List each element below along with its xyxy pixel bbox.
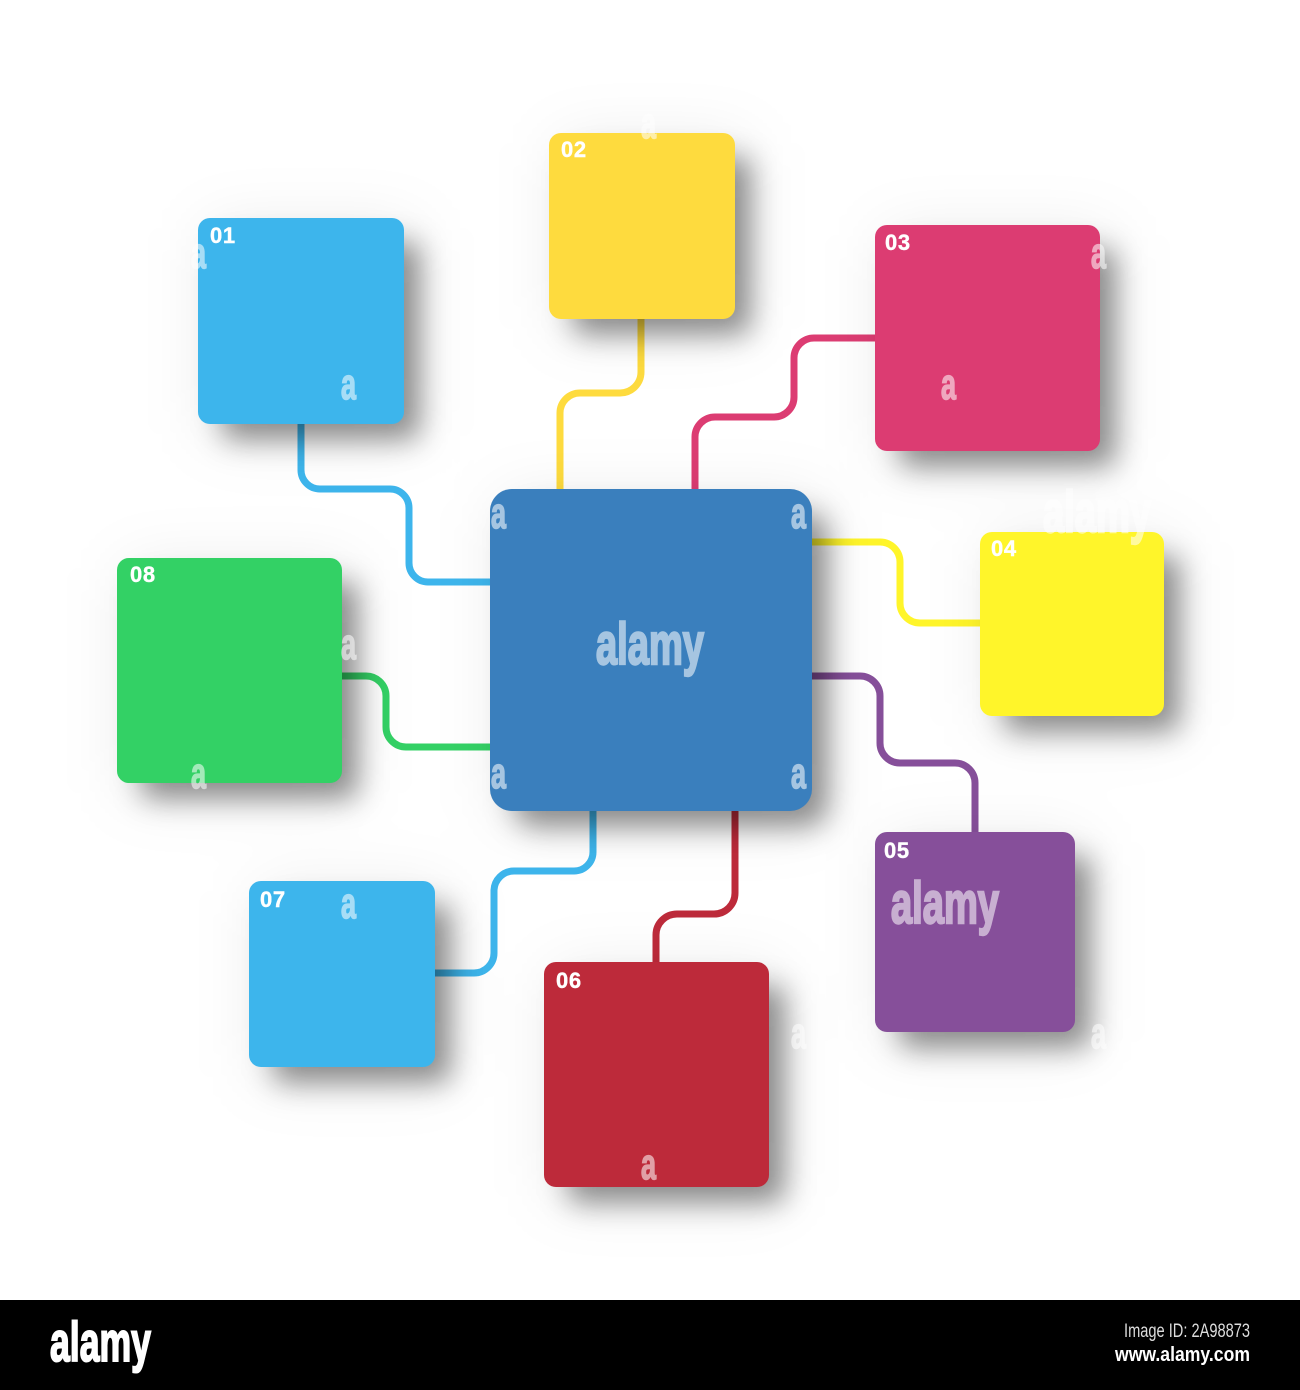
box 05 <box>875 832 1075 1032</box>
box 03 <box>875 225 1100 451</box>
box 06: 06 <box>556 968 582 993</box>
box 07 <box>249 881 435 1067</box>
connector 03 <box>695 338 876 490</box>
footer bar <box>0 1300 1300 1390</box>
watermarks: a <box>341 360 356 409</box>
box 06 <box>544 962 769 1187</box>
watermarks: a <box>341 879 356 928</box>
connector 02 <box>560 319 641 490</box>
watermarks: alamy <box>891 871 999 936</box>
box 08: 08 <box>130 562 156 587</box>
box 02 <box>549 133 735 319</box>
drop shadows <box>127 143 1180 1203</box>
central hub box <box>490 489 812 811</box>
watermarks: a <box>791 749 806 798</box>
watermarks: a <box>791 489 806 538</box>
watermarks: a <box>1091 229 1106 278</box>
watermarks: alamy <box>596 612 704 677</box>
box 04 <box>980 532 1164 716</box>
watermarks: a <box>341 620 356 669</box>
box 08 <box>117 558 342 783</box>
watermarks: a <box>191 229 206 278</box>
box 03: 03 <box>885 230 911 255</box>
connector 04 <box>811 542 981 623</box>
website: www.alamy.com <box>1114 1344 1250 1366</box>
connector 06 <box>656 810 735 963</box>
box 01: 01 <box>210 223 236 248</box>
box 01 <box>198 218 404 424</box>
connector 05 <box>811 676 975 833</box>
watermarks: a <box>491 749 506 798</box>
watermarks: a <box>1091 1009 1106 1058</box>
box 04: 04 <box>991 536 1017 561</box>
watermarks: a <box>941 360 956 409</box>
watermarks <box>191 99 1151 1189</box>
box 02: 02 <box>561 137 587 162</box>
watermarks: a <box>791 1009 806 1058</box>
image id: Image ID: 2A98873 <box>1124 1321 1250 1342</box>
watermarks: a <box>191 749 206 798</box>
connector 01 <box>301 423 491 582</box>
watermarks: a <box>641 1140 656 1189</box>
watermarks: a <box>641 99 656 148</box>
box 05: 05 <box>884 838 910 863</box>
connector 07 <box>434 810 593 973</box>
watermarks: a <box>491 489 506 538</box>
box 07: 07 <box>260 887 286 912</box>
watermarks: alamy <box>1043 480 1151 545</box>
footer logo: alamy <box>50 1310 151 1373</box>
connector 08 <box>341 676 491 747</box>
